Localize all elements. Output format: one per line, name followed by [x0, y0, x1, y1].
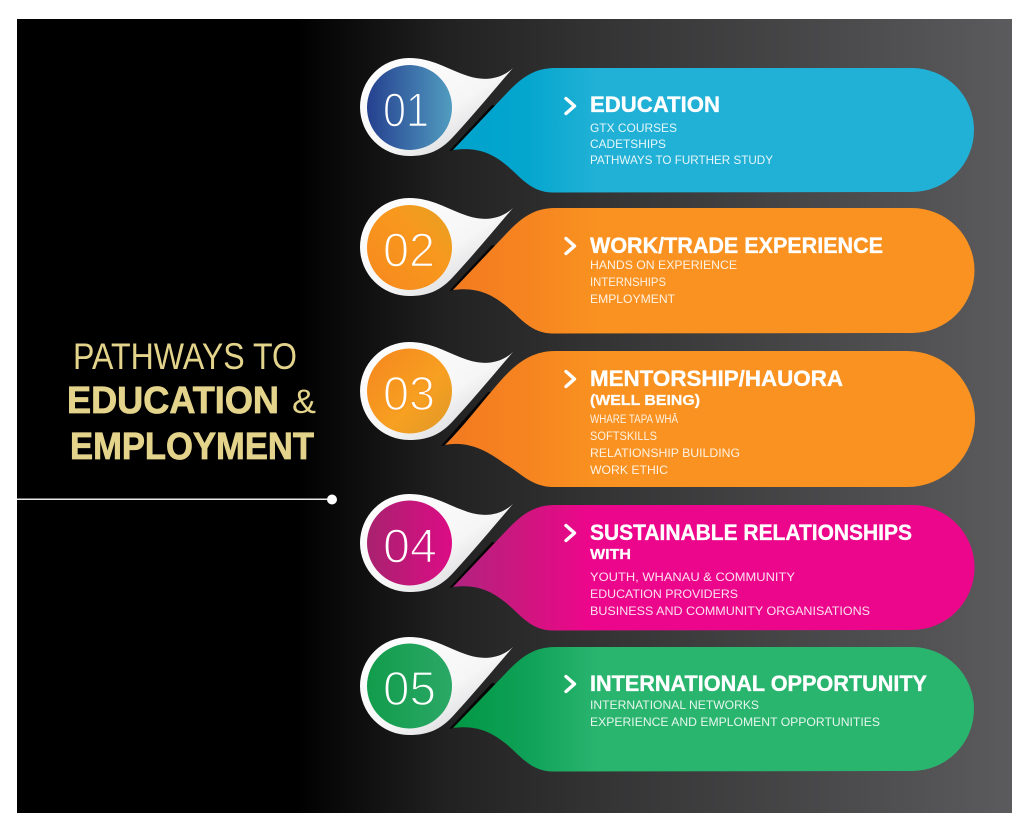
text: international opportunity: INTERNATIONAL NETWORKS: [590, 698, 759, 712]
teardrop badge 01: [360, 58, 513, 156]
text: work/trade: [590, 233, 883, 306]
bubble: education: [449, 68, 974, 192]
teardrop badge 05: 05: [383, 663, 436, 716]
bubble: work/trade: [449, 208, 975, 334]
text: mentorship: WORK ETHIC: [590, 463, 668, 477]
row 3: mentorship/hauora: [360, 342, 975, 487]
text: education: EDUCATION: [590, 92, 720, 117]
text: work/trade: WORK/TRADE EXPERIENCE: [590, 233, 883, 258]
connector line with dot: [17, 494, 337, 504]
title: EMPLOYMENT: [70, 426, 314, 468]
row 4: sustainable relationships: [360, 494, 975, 630]
title: &: [292, 383, 316, 421]
text: work/trade: HANDS ON EXPERIENCE: [590, 258, 737, 272]
title: [67, 336, 316, 468]
text: mentorship: WHARE TAPA WHĀ: [590, 414, 678, 426]
row 5: international opportunity: [360, 637, 974, 772]
title: PATHWAYS TO: [73, 336, 297, 377]
row 1: education: [360, 58, 974, 192]
text: education: PATHWAYS TO FURTHER STUDY: [590, 153, 773, 167]
text: mentorship: RELATIONSHIP BUILDING: [590, 446, 740, 460]
chevron: [566, 238, 574, 254]
bubble: international opportunity: [449, 647, 974, 772]
teardrop badge 04: [360, 494, 513, 592]
text: education: GTX COURSES: [590, 121, 677, 135]
text: sustainable relationships: WITH: [590, 546, 631, 563]
teardrop badge 02: 02: [383, 224, 435, 278]
text: mentorship: [590, 366, 843, 477]
title: EDUCATION: [67, 380, 279, 422]
text: sustainable relationships: EDUCATION PROVIDERS: [590, 587, 738, 601]
teardrop badge 03: 03: [383, 368, 435, 421]
chevron: [566, 526, 574, 540]
text: sustainable relationships: BUSINESS AND COMMUNITY ORGANISATIONS: [590, 604, 870, 618]
text: sustainable relationships: SUSTAINABLE RELATIONSHIPS: [590, 520, 912, 545]
teardrop badge 02: [360, 198, 513, 296]
chevron: [566, 98, 574, 114]
text: sustainable relationships: YOUTH, WHANAU & COMMUNITY: [590, 570, 795, 584]
text: international opportunity: EXPERIENCE AND EMPLOMENT OPPORTUNITIES: [590, 715, 880, 729]
chevron: [566, 372, 574, 386]
teardrop badge 03: [360, 342, 513, 440]
text: international opportunity: [590, 671, 927, 729]
text: mentorship: MENTORSHIP/HAUORA: [590, 366, 843, 391]
teardrop badge 01: 01: [383, 84, 429, 138]
text: work/trade: EMPLOYMENT: [590, 292, 676, 306]
text: international opportunity: INTERNATIONAL OPPORTUNITY: [590, 671, 927, 696]
text: work/trade: INTERNSHIPS: [590, 275, 666, 289]
bubble: mentorship: [441, 351, 975, 487]
text: sustainable relationships: [590, 520, 912, 618]
teardrop badge 05: [360, 637, 513, 735]
teardrop badge 04: 04: [383, 520, 437, 574]
chevron: [566, 676, 574, 692]
row 2: work/trade experience: [360, 198, 975, 334]
text: education: CADETSHIPS: [590, 137, 666, 151]
text: education: [590, 92, 773, 167]
text: mentorship: SOFTSKILLS: [590, 429, 657, 443]
text: mentorship: (WELL BEING): [590, 392, 700, 409]
bubble: sustainable relationships: [449, 505, 975, 630]
